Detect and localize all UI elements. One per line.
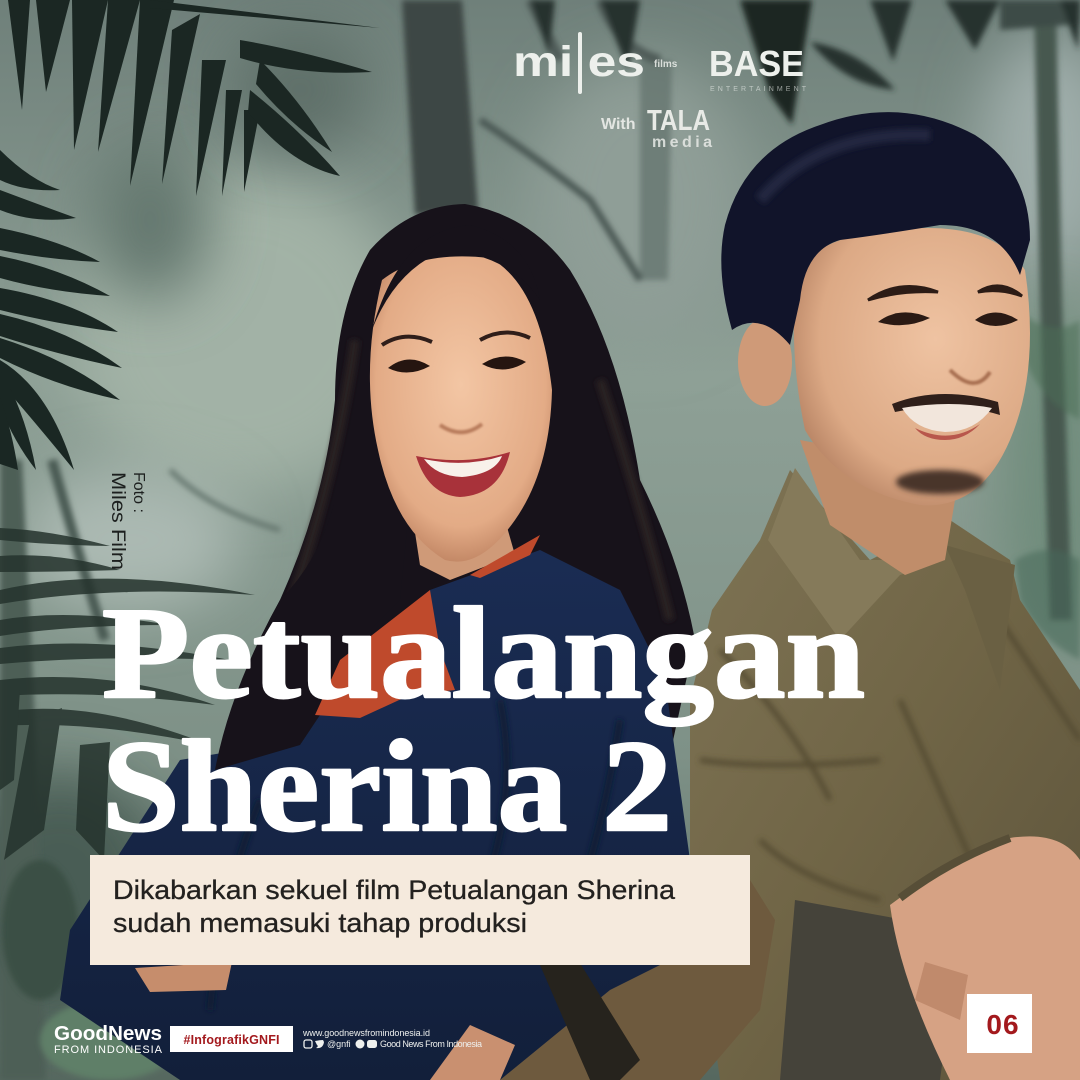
- palm frond: lower left: [0, 528, 255, 860]
- man nose: [950, 370, 990, 383]
- person: man: [690, 112, 1080, 1080]
- backpack: [480, 880, 775, 1080]
- man eyebrows: [868, 287, 938, 300]
- woman fringe: [372, 225, 540, 330]
- woman hair: [215, 204, 695, 800]
- footer: web and social: www.goodnewsfromindonesia.id: [302, 1028, 430, 1038]
- footer: hashtag label: #InfografikGNFI: [184, 1033, 280, 1047]
- footer: GoodNews logo: GoodNews: [54, 1023, 162, 1045]
- social icons: [304, 1040, 377, 1048]
- woman smile: [416, 452, 510, 497]
- woman face: [370, 256, 552, 562]
- footer: web and social: Good News From Indonesia: [380, 1039, 482, 1049]
- title: [102, 581, 865, 859]
- woman nose: [440, 424, 482, 432]
- man face: [794, 228, 1030, 505]
- logo: BASE Entertainment: BASE: [709, 43, 804, 84]
- logo: With TALA media: media: [652, 134, 712, 151]
- man moustache and smile: [892, 394, 1000, 415]
- logo: BASE Entertainment: ENTERTAINMENT: [710, 86, 807, 93]
- palm frond: left: [0, 150, 122, 470]
- woman shirt: [60, 550, 690, 1080]
- title: Sherina 2: [102, 714, 672, 859]
- footer: GoodNews logo: [54, 1023, 163, 1056]
- photo credit: Miles Film: [107, 472, 128, 570]
- logo: miles films: films: [654, 59, 678, 70]
- man arm: [890, 836, 1080, 1080]
- subtitle box: sudah memasuki tahap produksi: [113, 908, 527, 938]
- photo credit: [107, 472, 147, 570]
- footer: web and social: @gnfi: [327, 1039, 351, 1049]
- logo: With TALA media: [601, 105, 712, 151]
- backpack strap: [540, 955, 640, 1080]
- man hair: [721, 112, 1030, 345]
- palm frond: top left: [8, 0, 380, 196]
- man inner shirt and trousers: [780, 900, 960, 1080]
- footer: web and social: [302, 1028, 482, 1049]
- title: Petualangan: [102, 581, 865, 726]
- page number badge: 06: [986, 1009, 1020, 1040]
- man neck: [800, 440, 960, 575]
- woman eyes: [388, 359, 430, 373]
- man eyes: [878, 312, 930, 325]
- woman hand: [135, 962, 232, 992]
- logo: miles films: [513, 32, 678, 94]
- subtitle box: Dikabarkan sekuel film Petualangan Sherina: [113, 875, 676, 905]
- man shirt folds: [700, 620, 1080, 900]
- page number badge: [967, 994, 1032, 1053]
- logo: With TALA media: With: [601, 116, 636, 133]
- woman lower hair over shirt: [215, 500, 410, 770]
- lower left foliage: [2, 860, 180, 1080]
- man collar: [768, 468, 945, 640]
- footer: GoodNews logo: FROM INDONESIA: [54, 1044, 163, 1056]
- logo: With TALA media: TALA: [647, 105, 710, 137]
- man hand: [915, 962, 968, 1020]
- footer: hashtag label: [170, 1026, 293, 1052]
- man shirt: [690, 470, 1080, 1080]
- woman neck: [410, 500, 515, 580]
- man goatee: [896, 470, 984, 494]
- woman eyebrows: [382, 337, 432, 345]
- woman scarf: [315, 590, 455, 718]
- man ear: [738, 318, 792, 406]
- subtitle box: [90, 855, 750, 965]
- logo: miles films: miles: [513, 38, 645, 86]
- person: woman: [60, 204, 775, 1080]
- photo credit: Foto :: [130, 472, 147, 513]
